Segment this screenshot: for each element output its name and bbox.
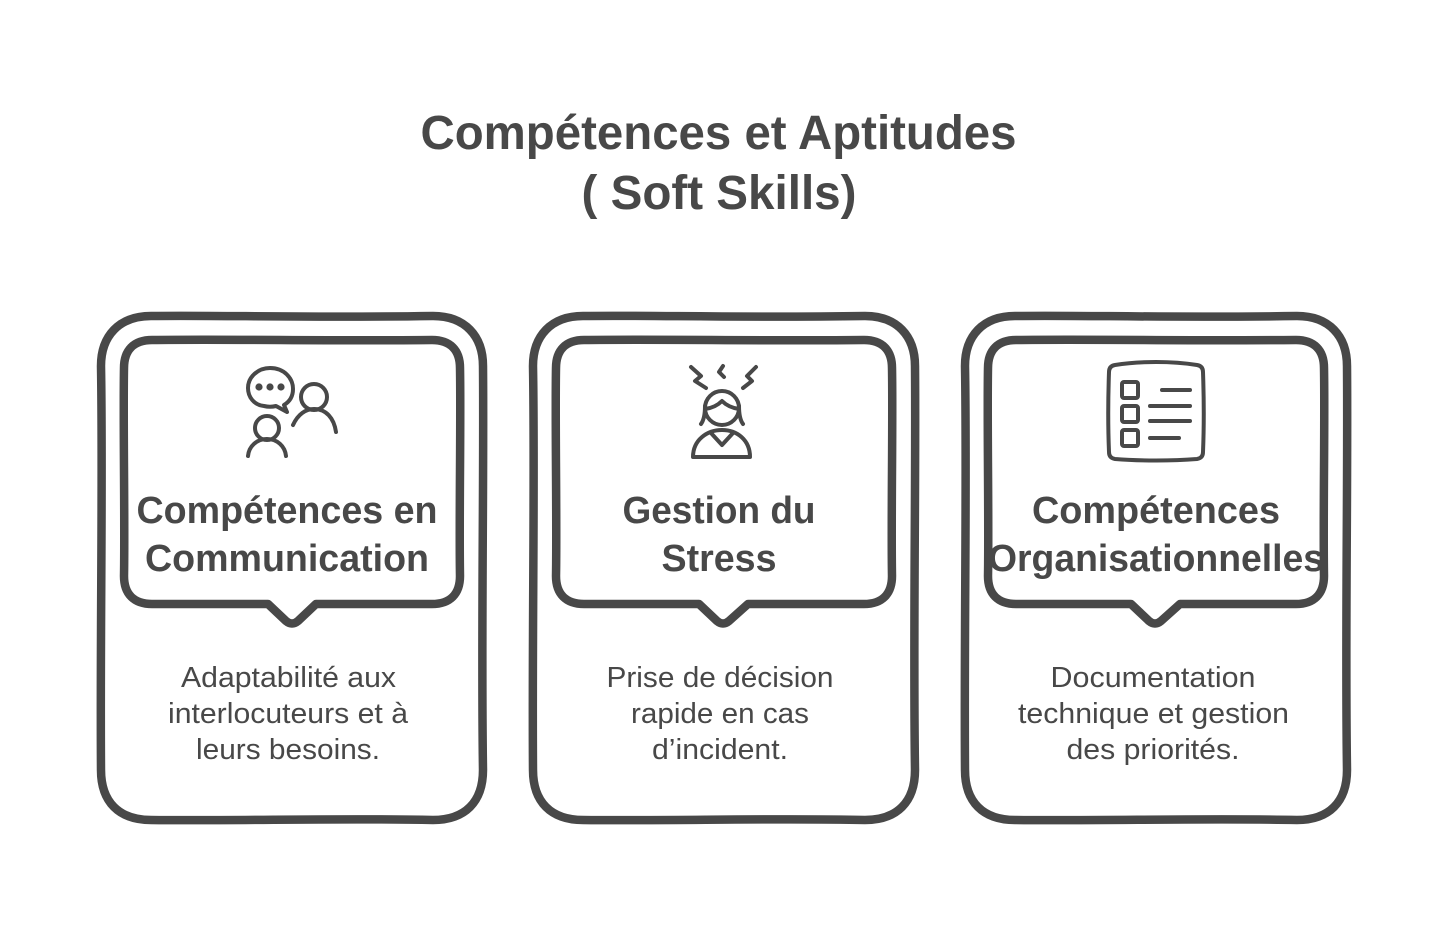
body text: communication: interlocuteurs et à: [168, 698, 409, 730]
body text: organisation: des priorités.: [1066, 734, 1240, 766]
body text: organisation: technique et gestion: [1018, 698, 1289, 730]
body text: stress: rapide en cas: [631, 698, 809, 730]
body text: communication: leurs besoins.: [196, 734, 380, 766]
icon: people talking: [248, 368, 336, 456]
body text: stress: Prise de décision: [606, 662, 834, 694]
icon: stressed person: [691, 366, 756, 457]
body text: organisation: [1018, 662, 1289, 766]
heading: communication: Compétences en: [136, 490, 438, 532]
heading: stress: [622, 490, 816, 580]
heading: organisation: [988, 490, 1324, 580]
speech bubble frame: organisation: [988, 340, 1324, 624]
heading: stress: Stress: [662, 538, 776, 580]
body text: communication: Adaptabilité aux: [181, 662, 397, 694]
heading: communication: [136, 490, 438, 580]
panel: stress: [533, 316, 915, 820]
heading: communication: Communication: [145, 538, 429, 580]
body text: organisation: Documentation: [1050, 662, 1256, 694]
heading: stress: Gestion du: [622, 490, 816, 532]
icon: checklist: [1108, 362, 1204, 460]
heading: organisation: Compétences: [1032, 490, 1280, 532]
heading: organisation: Organisationnelles: [988, 538, 1324, 580]
panel: organisation: [965, 316, 1347, 820]
body text: communication: [168, 662, 409, 766]
outer frame: organisation: [965, 316, 1347, 820]
outer frame: stress: [533, 316, 915, 820]
outer frame: communication: [101, 316, 483, 820]
panel: communication: [101, 316, 483, 820]
body text: stress: [606, 662, 834, 766]
title: Compétences et Aptitudes: [420, 107, 1016, 160]
title: [420, 107, 1016, 220]
speech bubble frame: stress: [556, 340, 892, 624]
body text: stress: d’incident.: [652, 734, 788, 766]
speech bubble frame: communication: [124, 340, 460, 624]
title: ( Soft Skills): [582, 167, 856, 220]
